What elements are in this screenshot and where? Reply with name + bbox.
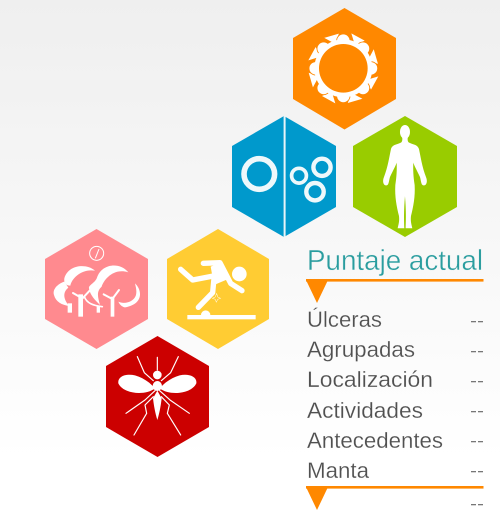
top orange divider with pointer [306, 279, 484, 303]
row: Actividades: Actividades [307, 398, 423, 423]
total score placeholder [471, 504, 483, 505]
hexagon: green human body [353, 116, 457, 237]
row: Antecedentes: Antecedentes [307, 428, 443, 453]
hexagon: pink trees and clock [45, 229, 148, 349]
hexagon: orange sun [293, 8, 396, 130]
row: Úlceras: Úlceras [307, 307, 382, 332]
row: Localización: Localización [307, 367, 433, 392]
hexagon: yellow falling person [167, 229, 269, 349]
hexagon: blue rings [232, 116, 336, 237]
score list [307, 307, 483, 483]
row: Manta: Manta [307, 458, 370, 483]
bottom orange divider with pointer [306, 486, 484, 510]
row: Agrupadas: Agrupadas [307, 337, 415, 362]
heading: Puntaje actual: Puntaje actual [307, 245, 483, 277]
hexagon: red mosquito [106, 336, 209, 457]
